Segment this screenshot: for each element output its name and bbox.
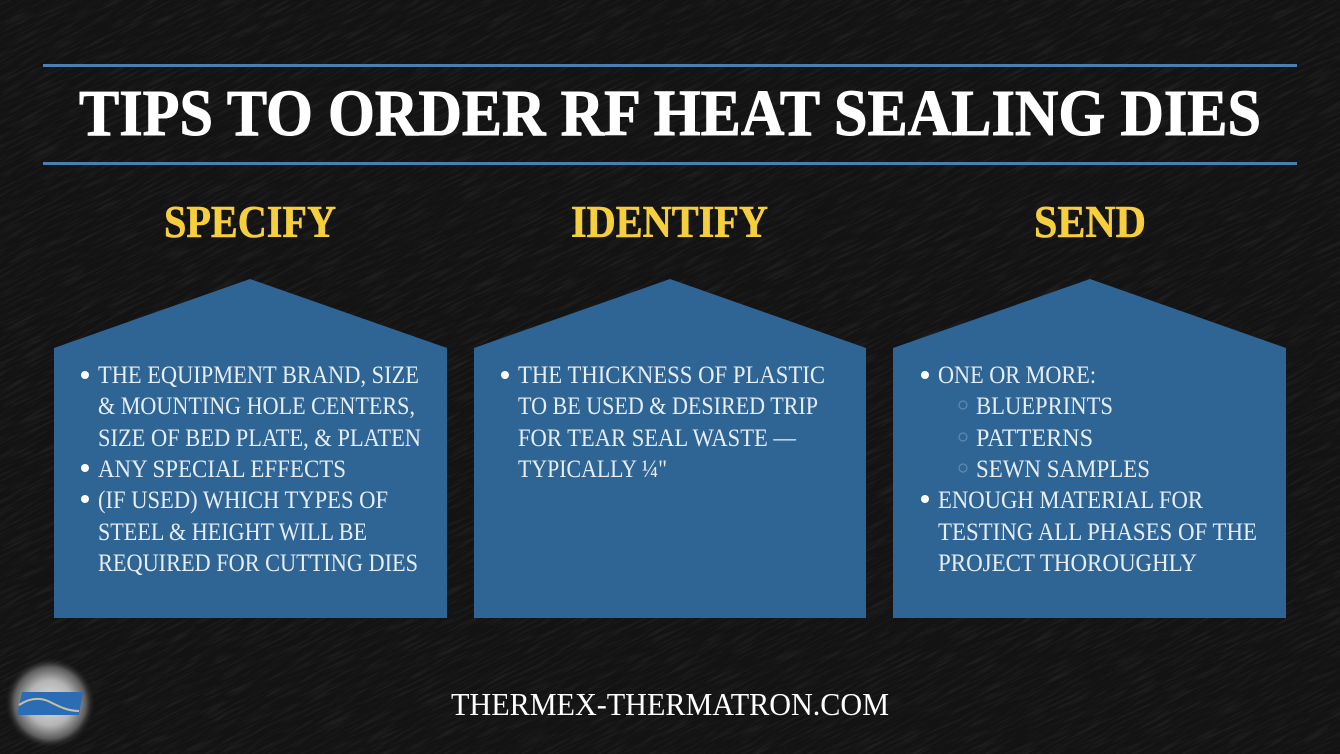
bullet list: specify: SIZE OF BED PLATE, & PLATEN	[98, 425, 421, 452]
title top rule and bottom rule	[43, 64, 1297, 165]
panel shape: specify	[54, 279, 447, 618]
bullet list: identify: THE THICKNESS OF PLASTIC	[518, 362, 825, 389]
bullet list: send: SEWN SAMPLES	[976, 456, 1150, 483]
bullet list: send	[921, 362, 1257, 577]
panel: identify	[474, 279, 866, 618]
bullet list: specify: & MOUNTING HOLE CENTERS,	[98, 393, 415, 420]
bullet list: identify: FOR TEAR SEAL WASTE —	[518, 425, 797, 452]
heading: identify: IDENTIFY	[571, 197, 768, 247]
bullet list: send: TESTING ALL PHASES OF THE	[938, 519, 1257, 546]
panel shape: identify	[474, 279, 866, 618]
bullet list: identify: TO BE USED & DESIRED TRIP	[518, 393, 818, 420]
panel: specify	[54, 279, 447, 618]
panel: send	[893, 279, 1286, 618]
title: TIPS TO ORDER RF HEAT SEALING DIES	[79, 77, 1261, 150]
bullet list: specify: REQUIRED FOR CUTTING DIES	[98, 550, 418, 577]
bullet list: specify: STEEL & HEIGHT WILL BE	[98, 519, 367, 546]
bullet list: send: ONE OR MORE:	[938, 362, 1096, 389]
panel shape: send	[893, 279, 1286, 618]
bullet list: specify	[81, 362, 421, 577]
bullet list: identify	[501, 362, 825, 483]
heading: send: SEND	[1034, 197, 1146, 247]
bullet list: specify: ANY SPECIAL EFFECTS	[98, 456, 346, 483]
bullet list: send: PROJECT THOROUGHLY	[938, 550, 1197, 577]
bullet list: send: BLUEPRINTS	[976, 393, 1113, 420]
icon: logo	[5, 658, 95, 748]
bullet list: identify: TYPICALLY ¼"	[518, 456, 667, 483]
bullet list: send: ENOUGH MATERIAL FOR	[938, 487, 1203, 514]
bullet list: specify: THE EQUIPMENT BRAND, SIZE	[98, 362, 419, 389]
bullet list: send: PATTERNS	[976, 425, 1093, 452]
bullet list: specify: (IF USED) WHICH TYPES OF	[98, 487, 388, 514]
website address: THERMEX-THERMATRON.COM	[451, 686, 889, 722]
heading: specify: SPECIFY	[164, 197, 336, 247]
